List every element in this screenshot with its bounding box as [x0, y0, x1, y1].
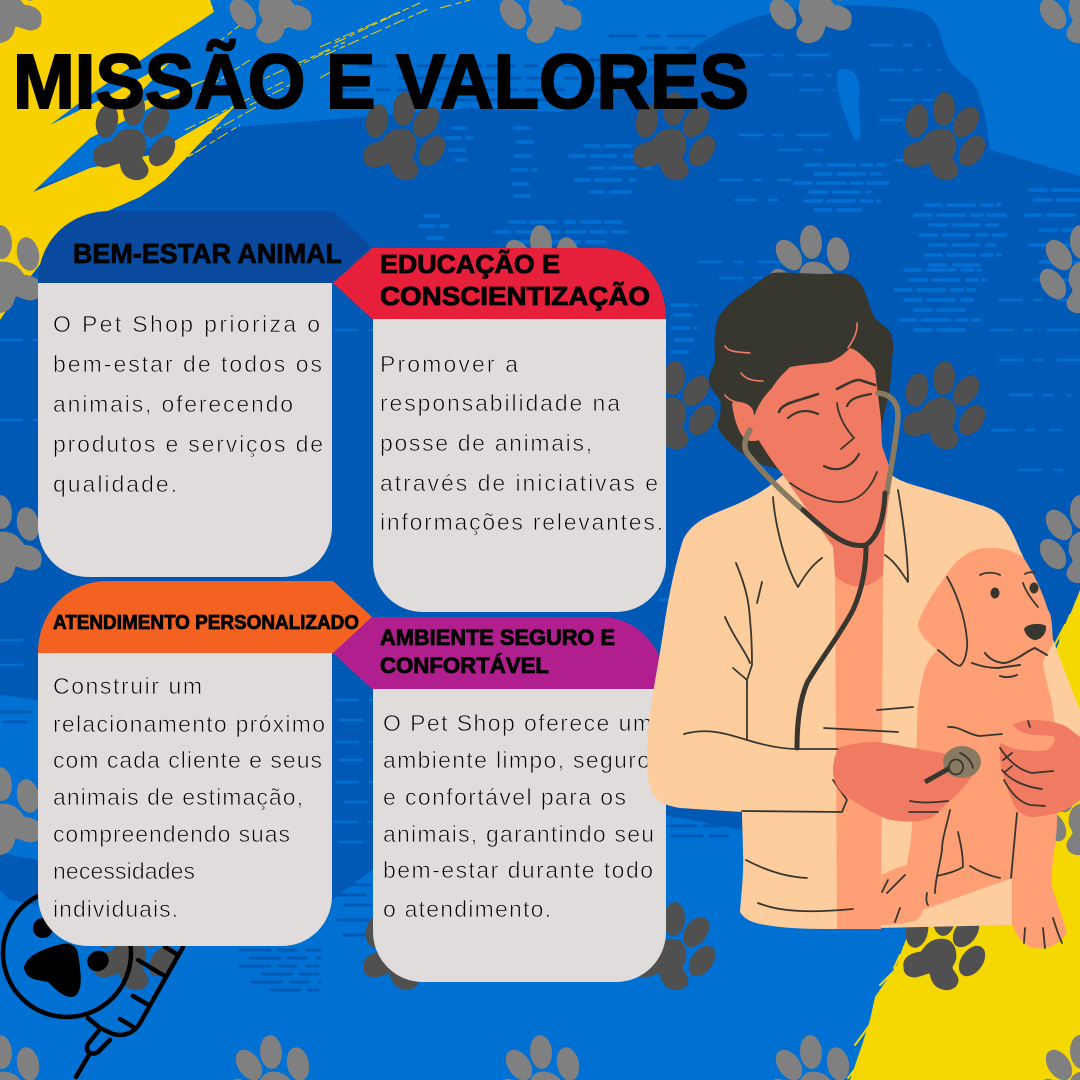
- heading: bem-estar animal: BEM-ESTAR ANIMAL: [73, 238, 342, 269]
- neck skin: [783, 440, 892, 586]
- title: MISSÃO E VALORES: [13, 38, 749, 125]
- body: ambiente seguro e confortável: [373, 689, 666, 982]
- heading: atendimento personalizado: ATENDIMENTO PERSONALIZADO: [53, 612, 359, 634]
- background: yellow brush top-left: [0, 0, 470, 320]
- ear: [732, 402, 760, 441]
- text: ambiente seguro e confortável: O Pet Shop oferece um: [383, 710, 652, 736]
- panel: atendimento personalizado: [38, 581, 372, 946]
- heading: educação e conscientização: [380, 249, 650, 311]
- heading: educação e conscientização: EDUCAÇÃO E: [380, 249, 560, 279]
- text: atendimento personalizado: animais de estimação,: [53, 784, 303, 810]
- puppy lines: [882, 572, 1062, 948]
- body: atendimento personalizado: [38, 653, 332, 946]
- vet left hand: [1000, 720, 1080, 817]
- puppy eyes and nose: [990, 582, 1046, 640]
- header: ambiente seguro e confortável: [333, 617, 666, 689]
- text: ambiente seguro e confortável: [383, 710, 654, 922]
- text: ambiente seguro e confortável: bem-estar durante todo: [383, 857, 653, 883]
- text: educação e conscientização: através de iniciativas e: [380, 470, 658, 496]
- text: atendimento personalizado: relacionamento próximo: [53, 711, 325, 737]
- text: atendimento personalizado: [53, 673, 325, 922]
- header: atendimento personalizado: [38, 581, 372, 653]
- text: atendimento personalizado: com cada cliente e seus: [53, 747, 322, 773]
- hand finger lines: [909, 721, 1053, 812]
- text: atendimento personalizado: necessidades: [53, 858, 195, 884]
- heading: ambiente seguro e confortável: AMBIENTE SEGURO E: [380, 625, 615, 650]
- text: ambiente seguro e confortável: animais, garantindo seu: [383, 821, 654, 847]
- header: educação e conscientização: [333, 248, 666, 319]
- text: bem-estar animal: animais, oferecendo: [53, 391, 293, 417]
- icon: syringe with paw: [3, 889, 183, 1077]
- text: educação e conscientização: informações relevantes.: [380, 509, 663, 535]
- background: yellow brush bottom-right: [848, 590, 1080, 1080]
- stethoscope: [745, 393, 898, 748]
- body: educação e conscientização: [373, 319, 666, 612]
- face: [753, 348, 882, 502]
- text: ambiente seguro e confortável: o atendimento.: [383, 896, 551, 922]
- heading: educação e conscientização: CONSCIENTIZAÇÃO: [380, 281, 650, 311]
- body: bem-estar animal: [38, 283, 332, 577]
- text: atendimento personalizado: Construir um: [53, 673, 202, 699]
- coat orange shadow strip: [835, 575, 883, 929]
- text: ambiente seguro e confortável: ambiente limpo, seguro: [383, 747, 650, 773]
- panel: ambiente seguro e confortável: [333, 617, 666, 982]
- text: bem-estar animal: [53, 311, 323, 497]
- text: bem-estar animal: produtos e serviços de: [53, 431, 323, 457]
- heading: ambiente seguro e confortável: CONFORTÁVEL: [380, 653, 549, 678]
- panel: educação e conscientização: [333, 248, 666, 612]
- stethoscope chest piece: [925, 746, 981, 782]
- header: bem-estar animal: [38, 211, 372, 283]
- panel: bem-estar animal: [38, 211, 372, 577]
- hair: [709, 273, 893, 475]
- text: educação e conscientização: Promover a: [380, 351, 518, 377]
- text: bem-estar animal: bem-estar de todos os: [53, 351, 322, 377]
- text: atendimento personalizado: individuais.: [53, 896, 178, 922]
- illustration: veterinarian holding a puppy: [647, 273, 1080, 949]
- heading: ambiente seguro e confortável: [380, 625, 615, 678]
- vet right hand: [833, 742, 975, 822]
- coat collar and seams: [684, 490, 913, 911]
- text: ambiente seguro e confortável: e confortável para os: [383, 784, 626, 810]
- puppy: [880, 548, 1067, 949]
- coat: [647, 475, 1080, 929]
- text: bem-estar animal: qualidade.: [53, 471, 177, 497]
- text: educação e conscientização: posse de animais,: [380, 430, 592, 456]
- hair highlights: [725, 323, 857, 403]
- text: educação e conscientização: responsabilidade na: [380, 390, 620, 416]
- text: bem-estar animal: O Pet Shop prioriza o: [53, 311, 320, 337]
- paw print pattern: dark grey paws: [93, 92, 990, 990]
- text: educação e conscientização: [380, 351, 663, 535]
- text: atendimento personalizado: compreendendo suas: [53, 821, 290, 847]
- facial features: [779, 380, 877, 502]
